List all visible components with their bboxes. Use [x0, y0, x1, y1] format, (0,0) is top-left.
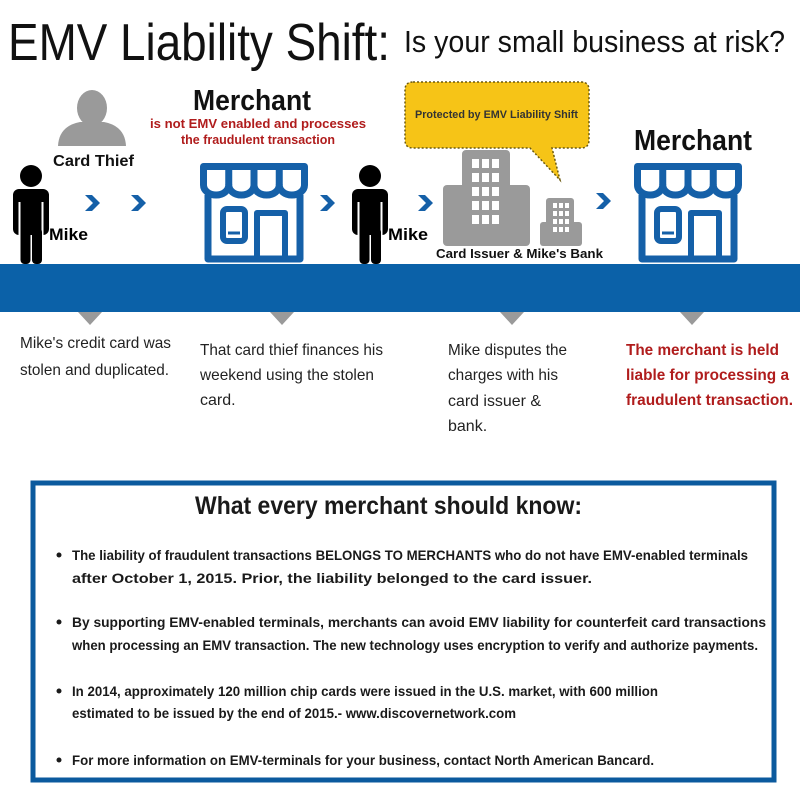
- text: step 4: fraudulent transaction.: [626, 392, 793, 409]
- icon: store 2: [638, 166, 738, 259]
- text: step 4: liable for processing a: [626, 367, 789, 384]
- icon: mike 2: Mike: [388, 225, 428, 244]
- text: step 1: Mike's credit card was: [20, 335, 171, 352]
- panel: what every merchant should know: [33, 483, 774, 780]
- heading: merchant 1: the fraudulent transaction: [181, 132, 335, 147]
- bullet list: For more information on EMV-terminals for your business, contact North American Bancard.: [72, 752, 654, 768]
- icon: buildings: [436, 150, 604, 261]
- text: step 3: Mike disputes the: [448, 342, 567, 359]
- heading: What every merchant should know:: [195, 492, 582, 520]
- text: step 2: [199, 342, 383, 409]
- bullet list: when processing an EMV transaction. The new technology uses encryption to verify and authorize payments.: [71, 637, 758, 653]
- text: step 2: card.: [200, 392, 236, 409]
- heading: merchant 1: is not EMV enabled and processes: [150, 116, 366, 131]
- icon: mike 2: [352, 165, 428, 264]
- icon: buildings: Card Issuer & Mike's Bank: [436, 246, 604, 261]
- text: step 3: charges with his: [448, 367, 558, 384]
- icon: store 1: [204, 166, 304, 259]
- heading: merchant 2: Merchant: [634, 125, 752, 157]
- bullet list: [56, 547, 766, 768]
- text: step 3: bank.: [448, 418, 487, 435]
- text: step 3: card issuer &: [448, 393, 541, 410]
- text: step 4: The merchant is held: [626, 342, 779, 359]
- icon: mike 1: Mike: [49, 225, 88, 244]
- callout: protected: [405, 82, 589, 180]
- icon: mike 1: [13, 165, 88, 264]
- timeline band: [0, 264, 800, 325]
- icon: card thief: [53, 90, 135, 170]
- arrows: [85, 193, 611, 211]
- text: step 1: stolen and duplicated.: [20, 362, 169, 379]
- bullet list: estimated to be issued by the end of 2015.- www.discovernetwork.com: [72, 705, 516, 721]
- bullet list: In 2014, approximately 120 million chip cards were issued in the U.S. market, with 600 million: [72, 683, 658, 699]
- title: [8, 14, 785, 72]
- text: step 2: weekend using the stolen: [199, 367, 374, 384]
- callout: protected: Protected by EMV Liability Shift: [415, 109, 578, 121]
- text: step 2: That card thief finances his: [200, 342, 383, 359]
- title: EMV Liability Shift:: [8, 14, 390, 72]
- icon: card thief: Card Thief: [53, 153, 135, 170]
- text: step 1: [20, 335, 171, 379]
- bullet list: The liability of fraudulent transactions BELONGS TO MERCHANTS who do not have EMV-enabled terminals: [72, 547, 748, 563]
- bullet list: after October 1, 2015. Prior, the liability belonged to the card issuer.: [72, 570, 592, 586]
- bullet list: By supporting EMV-enabled terminals, merchants can avoid EMV liability for counterfeit card transactions: [72, 614, 766, 630]
- heading: merchant 1: Merchant: [193, 85, 311, 117]
- text: step 4: [626, 342, 793, 409]
- heading: merchant 1: [150, 85, 366, 147]
- text: step 3: [448, 342, 567, 435]
